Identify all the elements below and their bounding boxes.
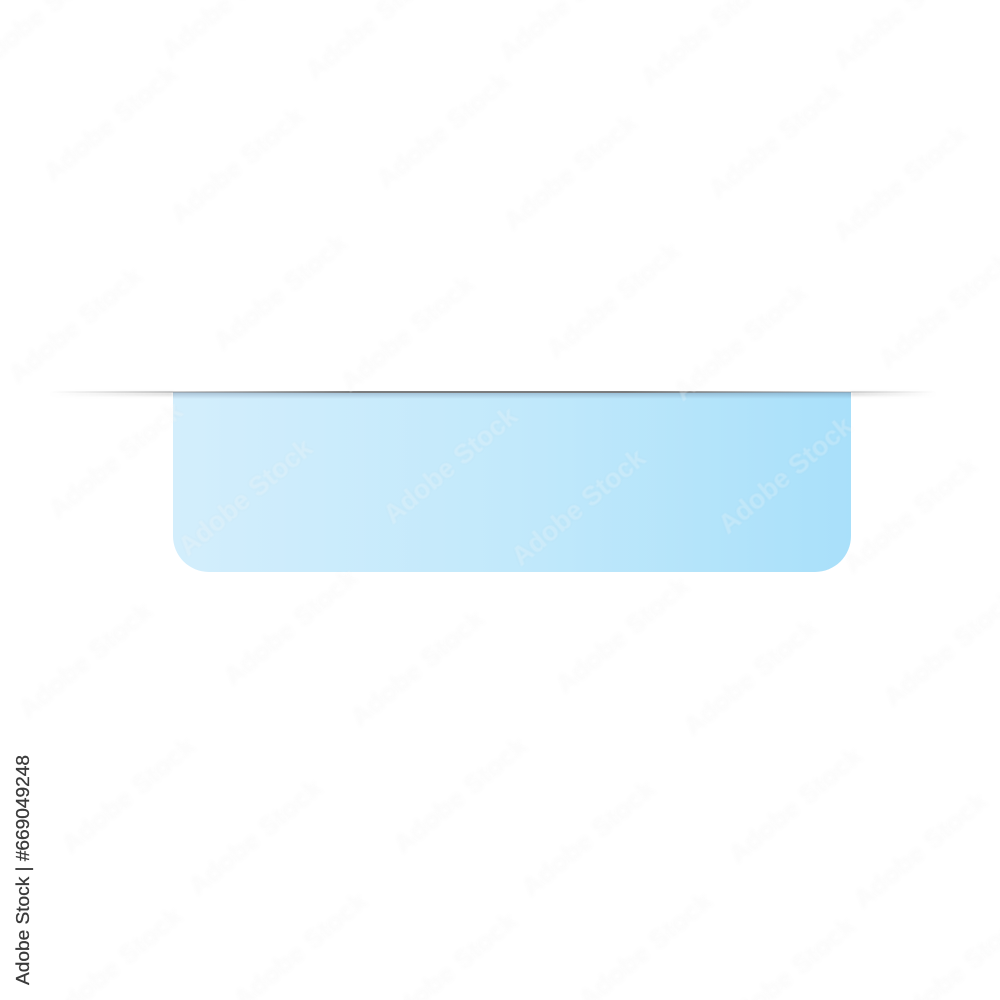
stock watermark pattern: Adobe Stock bbox=[344, 603, 491, 733]
stock watermark pattern: Adobe Stock bbox=[12, 595, 159, 725]
blue ribbon panel bbox=[173, 392, 851, 572]
stock watermark pattern: Adobe Stock bbox=[164, 100, 311, 230]
stock watermark pattern: Adobe Stock bbox=[722, 740, 869, 870]
stock watermark pattern: Adobe Stock bbox=[370, 65, 517, 195]
stock credit text: Adobe Stock | #669049248 bbox=[13, 755, 33, 985]
stock watermark pattern: Adobe Stock bbox=[207, 227, 354, 357]
stock watermark pattern: Adobe Stock bbox=[37, 58, 184, 188]
stock watermark pattern: Adobe Stock bbox=[182, 772, 329, 902]
stock watermark pattern: Adobe Stock bbox=[2, 260, 149, 390]
stock watermark pattern: Adobe Stock bbox=[172, 432, 319, 562]
slit shadow line bbox=[50, 391, 936, 396]
stock watermark pattern: Adobe Stock bbox=[712, 410, 859, 540]
stock watermark pattern: Adobe Stock bbox=[387, 730, 534, 860]
stock watermark pattern: Adobe Stock bbox=[505, 442, 652, 572]
stock watermark pattern: Adobe Stock bbox=[847, 785, 994, 915]
stock watermark pattern: Adobe Stock bbox=[55, 730, 202, 860]
stock watermark pattern: Adobe Stock bbox=[515, 773, 662, 903]
stock watermark pattern: Adobe Stock bbox=[677, 612, 824, 742]
stock watermark pattern: Adobe Stock bbox=[42, 395, 189, 525]
stock watermark pattern: Adobe Stock bbox=[549, 570, 696, 700]
stock watermark pattern: Adobe Stock bbox=[837, 450, 984, 580]
stock watermark pattern: Adobe Stock bbox=[540, 235, 687, 365]
stock watermark pattern: Adobe Stock bbox=[377, 400, 524, 530]
stock watermark pattern: Adobe Stock bbox=[497, 107, 644, 237]
stock watermark pattern: Adobe Stock bbox=[217, 562, 364, 692]
stock watermark pattern: Adobe Stock bbox=[827, 118, 974, 248]
stock watermark pattern: Adobe Stock bbox=[334, 268, 481, 398]
stock watermark pattern: Adobe Stock bbox=[667, 277, 814, 407]
stock watermark pattern: Adobe Stock bbox=[702, 75, 849, 205]
